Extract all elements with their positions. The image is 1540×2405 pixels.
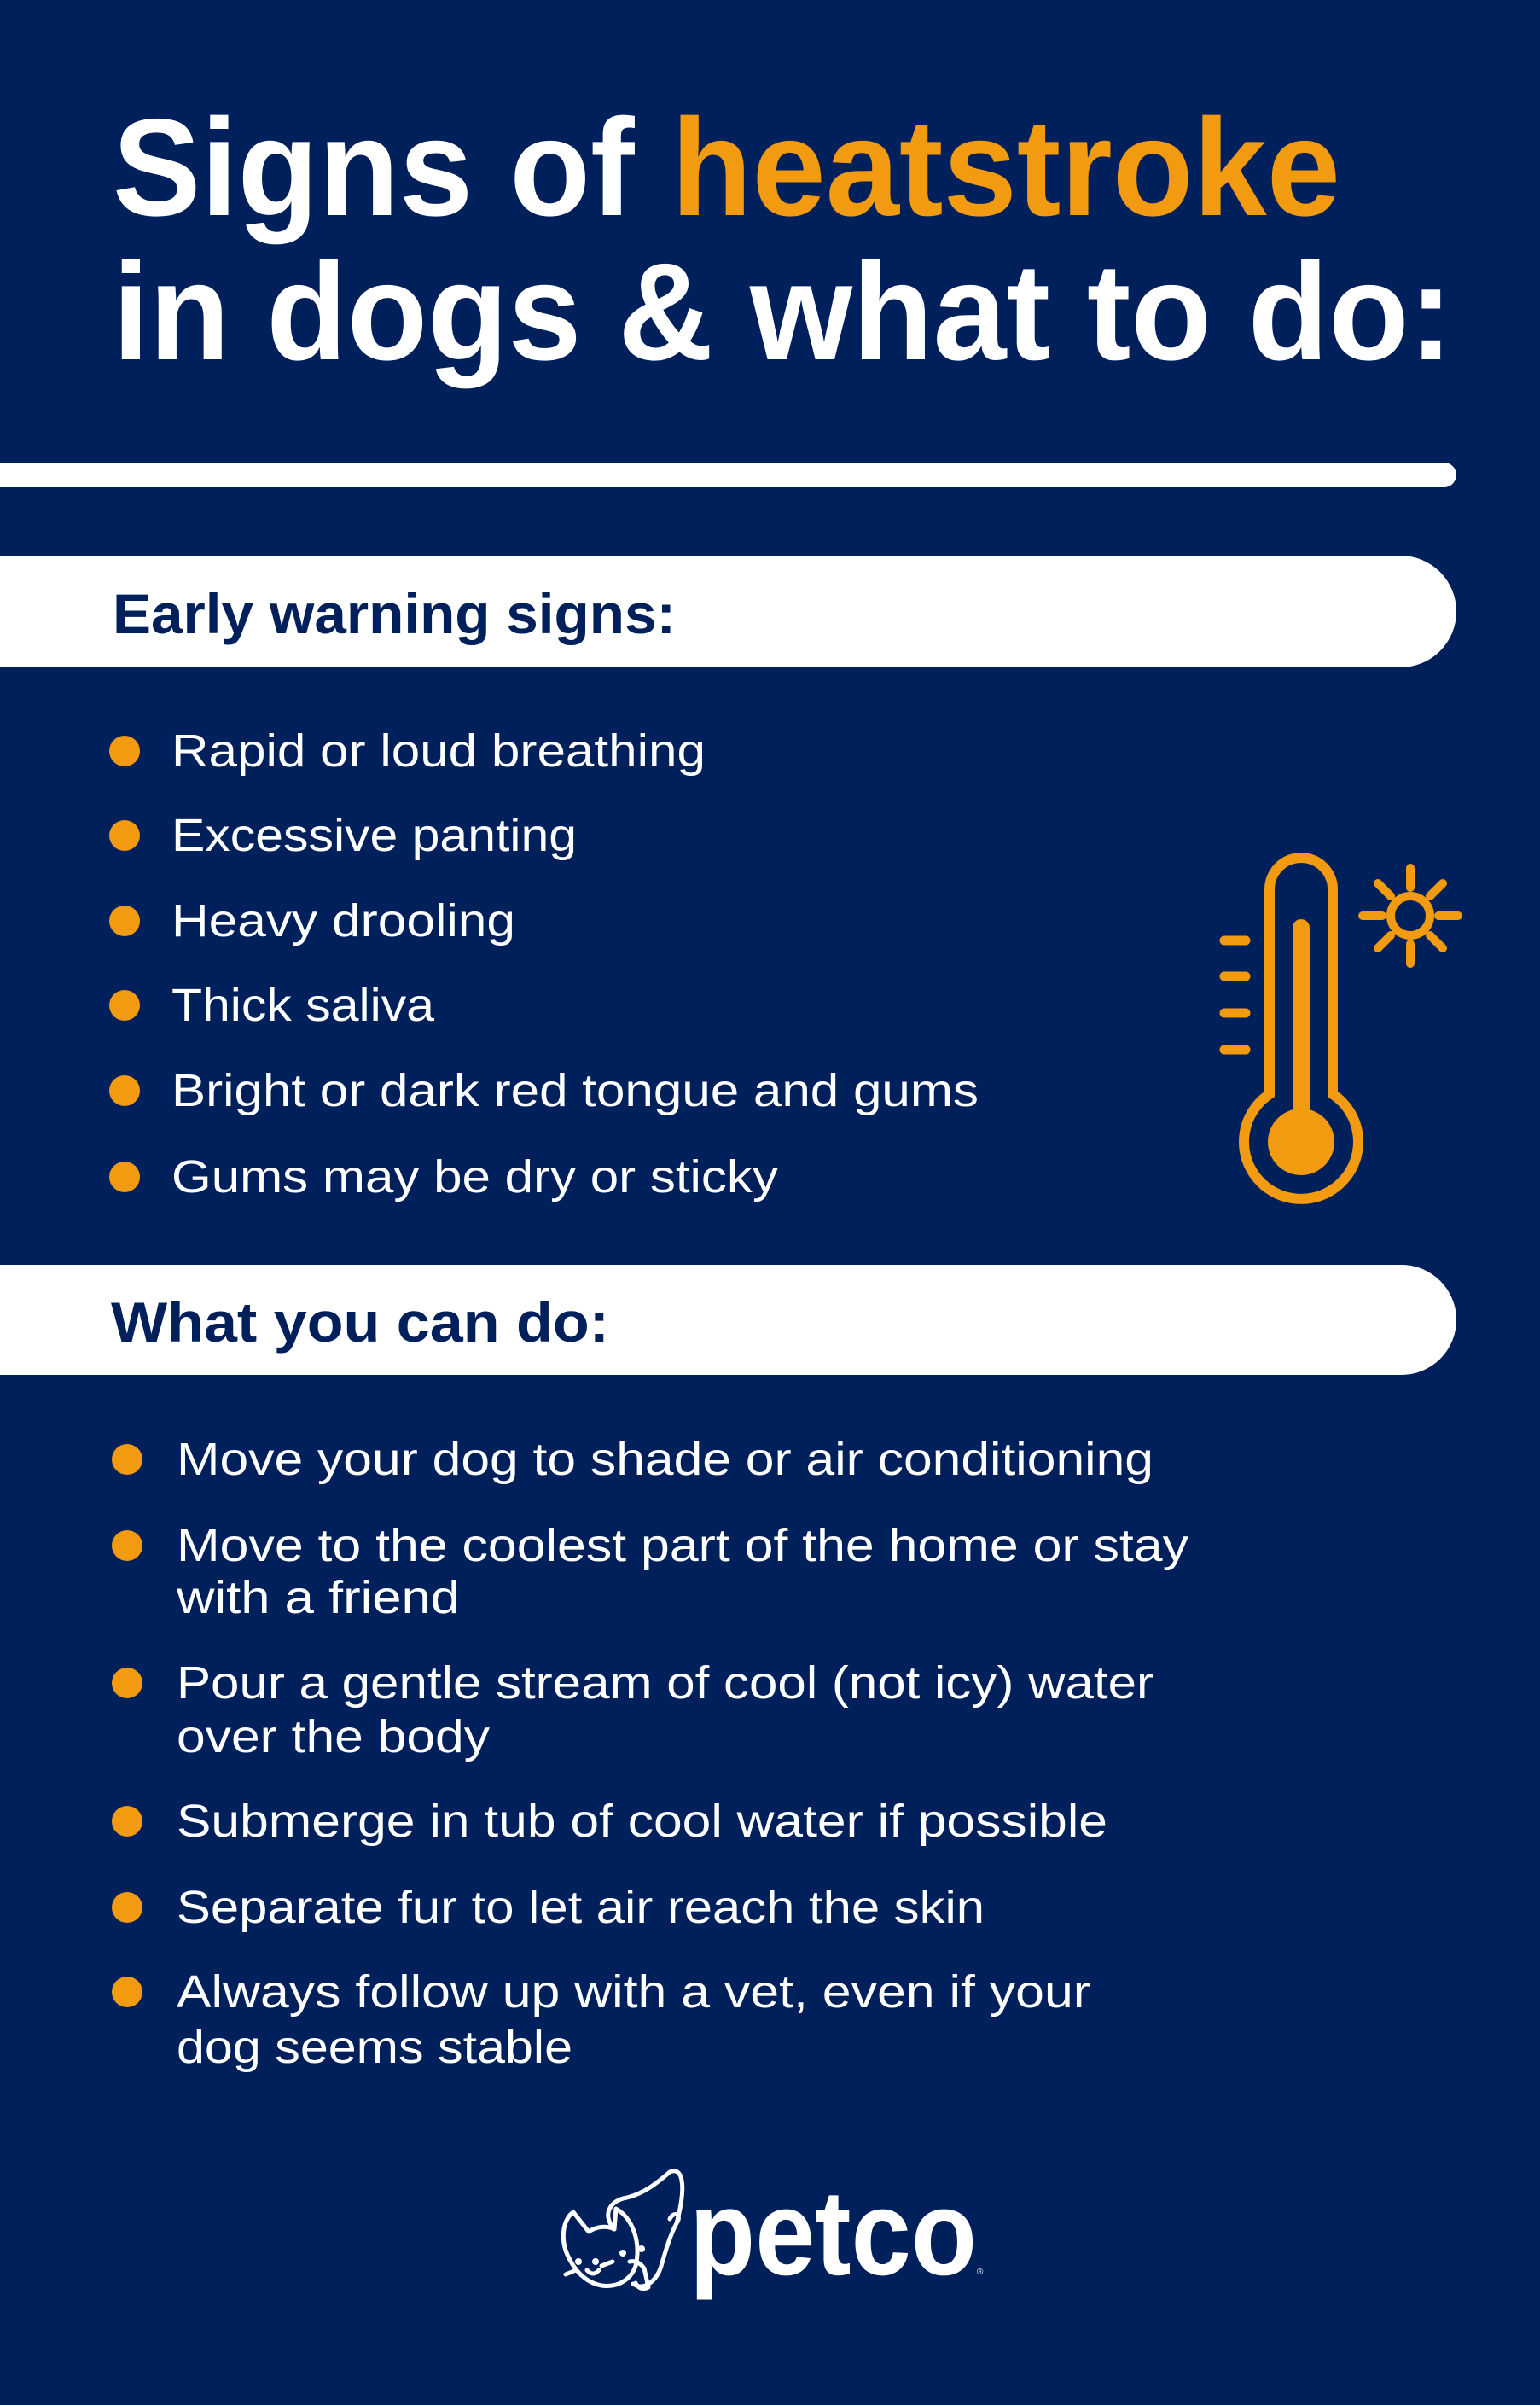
list: what you can do: Move your dog to shade or air conditioning: [177, 1434, 1154, 1485]
list: what you can do: over the body: [177, 1711, 490, 1762]
title: [113, 90, 1453, 389]
icon: thermometer with sun: [1224, 858, 1458, 1199]
list: early warning signs: Gums may be dry or sticky: [171, 1151, 778, 1202]
list: what you can do: Pour a gentle stream of cool (not icy) water: [177, 1657, 1154, 1709]
logo: petco: ®: [977, 2268, 984, 2277]
header: what you can do: What you can do:: [111, 1290, 609, 1354]
list: early warning signs: Thick saliva: [171, 980, 435, 1031]
header: early warning signs: Early warning signs:: [113, 582, 676, 645]
list: early warning signs: Heavy drooling: [171, 895, 515, 946]
list: what you can do: [112, 1434, 1188, 2073]
list: what you can do: Always follow up with a vet, even if your: [177, 1966, 1090, 2018]
header: early warning signs: [0, 556, 1456, 667]
list: what you can do: Submerge in tub of cool water if possible: [177, 1796, 1107, 1847]
title: Signs of heatstroke: [113, 90, 1340, 245]
icon: cat and dog: [563, 2171, 683, 2289]
list: what you can do: with a friend: [176, 1572, 460, 1623]
logo: petco: [563, 2165, 984, 2301]
list: what you can do: dog seems stable: [177, 2022, 572, 2073]
list: what you can do: Separate fur to let air reach the skin: [177, 1882, 985, 1933]
list: early warning signs: Rapid or loud breathing: [171, 725, 706, 777]
title: in dogs & what to do:: [113, 235, 1453, 389]
logo: petco: petco: [689, 2165, 977, 2301]
header: what you can do: [0, 1265, 1456, 1375]
list: what you can do: Move to the coolest part of the home or stay: [177, 1520, 1188, 1571]
list: early warning signs: Bright or dark red tongue and gums: [171, 1065, 979, 1116]
list: early warning signs: Excessive panting: [171, 810, 577, 861]
list: early warning signs: [109, 725, 979, 1202]
